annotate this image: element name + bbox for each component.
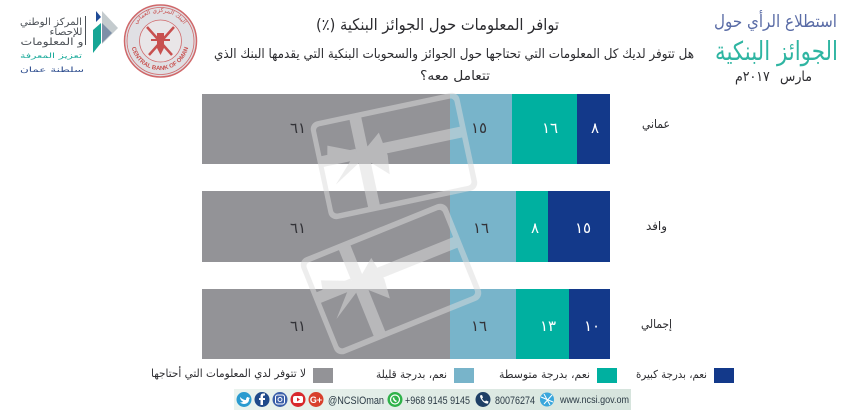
heading line 2: الجوائز البنكية bbox=[715, 37, 838, 67]
icon: whatsapp bbox=[388, 392, 402, 407]
NCSI name: للإحصاء bbox=[50, 27, 82, 38]
legend: no information: لا تتوفر لدي المعلومات التي أحتاجها bbox=[151, 366, 306, 380]
question text bbox=[214, 47, 694, 84]
legend: large degree bbox=[636, 368, 734, 383]
row: Omani: عماني bbox=[642, 117, 670, 131]
icon: google plus: G+ bbox=[310, 395, 322, 405]
date: مارس ٢٠١٧م bbox=[735, 69, 812, 85]
footer contact bar bbox=[234, 389, 631, 410]
NCSI name: و المعلومات bbox=[20, 37, 84, 48]
legend: large degree: نعم، بدرجة كبيرة bbox=[636, 368, 707, 381]
toll-free number: 80076274 bbox=[495, 395, 535, 407]
row: Omani: ١٦ bbox=[542, 119, 558, 137]
row: Expatriate: ١٦ bbox=[473, 219, 489, 237]
icon: globe bbox=[540, 392, 554, 406]
row: Total: ٦١ bbox=[290, 317, 306, 335]
legend bbox=[151, 366, 734, 383]
legend: small degree: نعم، بدرجة قليلة bbox=[376, 368, 447, 381]
row: Expatriate: وافد bbox=[646, 219, 667, 234]
logo: Central Bank of Oman: CENTRAL BANK OF OMAN bbox=[132, 46, 188, 70]
icon: gift watermark top bbox=[309, 91, 479, 221]
icon: phone bbox=[476, 392, 490, 407]
icon: youtube bbox=[290, 392, 306, 407]
row: Expatriate bbox=[202, 191, 667, 262]
NCSI tagline: تعزيز المعرفة bbox=[20, 52, 82, 60]
row: Omani: ٨ bbox=[591, 119, 599, 137]
row: Expatriate: ١٥ bbox=[575, 219, 591, 237]
NCSI country: سلطنة عمان bbox=[20, 66, 84, 74]
icon: facebook bbox=[254, 392, 270, 407]
legend: medium degree bbox=[499, 368, 617, 383]
row: Total bbox=[202, 289, 672, 359]
row: Expatriate: ٦١ bbox=[290, 219, 306, 237]
question text: هل تتوفر لديك كل المعلومات التي تحتاجها حول الجوائز والسحوبات البنكية التي يقدمها البنك الذي bbox=[214, 47, 694, 62]
row: Total: ١٦ bbox=[471, 317, 487, 335]
NCSI name: المركز الوطني bbox=[20, 17, 82, 28]
row: Omani: ١٥ bbox=[471, 119, 487, 137]
whatsapp number: +968 9145 9145 bbox=[405, 395, 470, 407]
heading line 1: استطلاع الرأي حول bbox=[714, 10, 837, 32]
legend: no information bbox=[151, 366, 333, 383]
icon: google plus bbox=[308, 392, 324, 407]
logo: Central Bank of Oman bbox=[124, 4, 198, 78]
row: Total: إجمالي bbox=[641, 317, 672, 331]
website: www.ncsi.gov.om bbox=[559, 395, 629, 406]
handle: @NCSIOman bbox=[328, 395, 384, 407]
logo: NCSI bbox=[20, 11, 118, 74]
icon: gift watermark bottom bbox=[298, 201, 484, 357]
question text: تتعامل معه؟ bbox=[420, 69, 490, 84]
survey heading bbox=[714, 10, 838, 85]
row: Omani: ٦١ bbox=[290, 119, 306, 137]
icon: instagram bbox=[272, 392, 288, 407]
row: Total: ١٠ bbox=[584, 317, 600, 335]
NCSI name bbox=[20, 16, 86, 48]
row: Omani bbox=[202, 94, 670, 164]
stacked bar chart bbox=[202, 94, 672, 359]
row: Total: ١٣ bbox=[540, 317, 556, 335]
logo: Central Bank of Oman: البنك المركزي العماني bbox=[136, 8, 187, 24]
NCSI mark bbox=[93, 11, 118, 53]
row: Expatriate: ٨ bbox=[531, 219, 539, 237]
title: توافر المعلومات حول الجوائز البنكية (٪) bbox=[316, 15, 559, 35]
icon: twitter bbox=[236, 392, 252, 407]
legend: medium degree: نعم، بدرجة متوسطة bbox=[499, 368, 590, 381]
legend: small degree bbox=[376, 368, 474, 383]
